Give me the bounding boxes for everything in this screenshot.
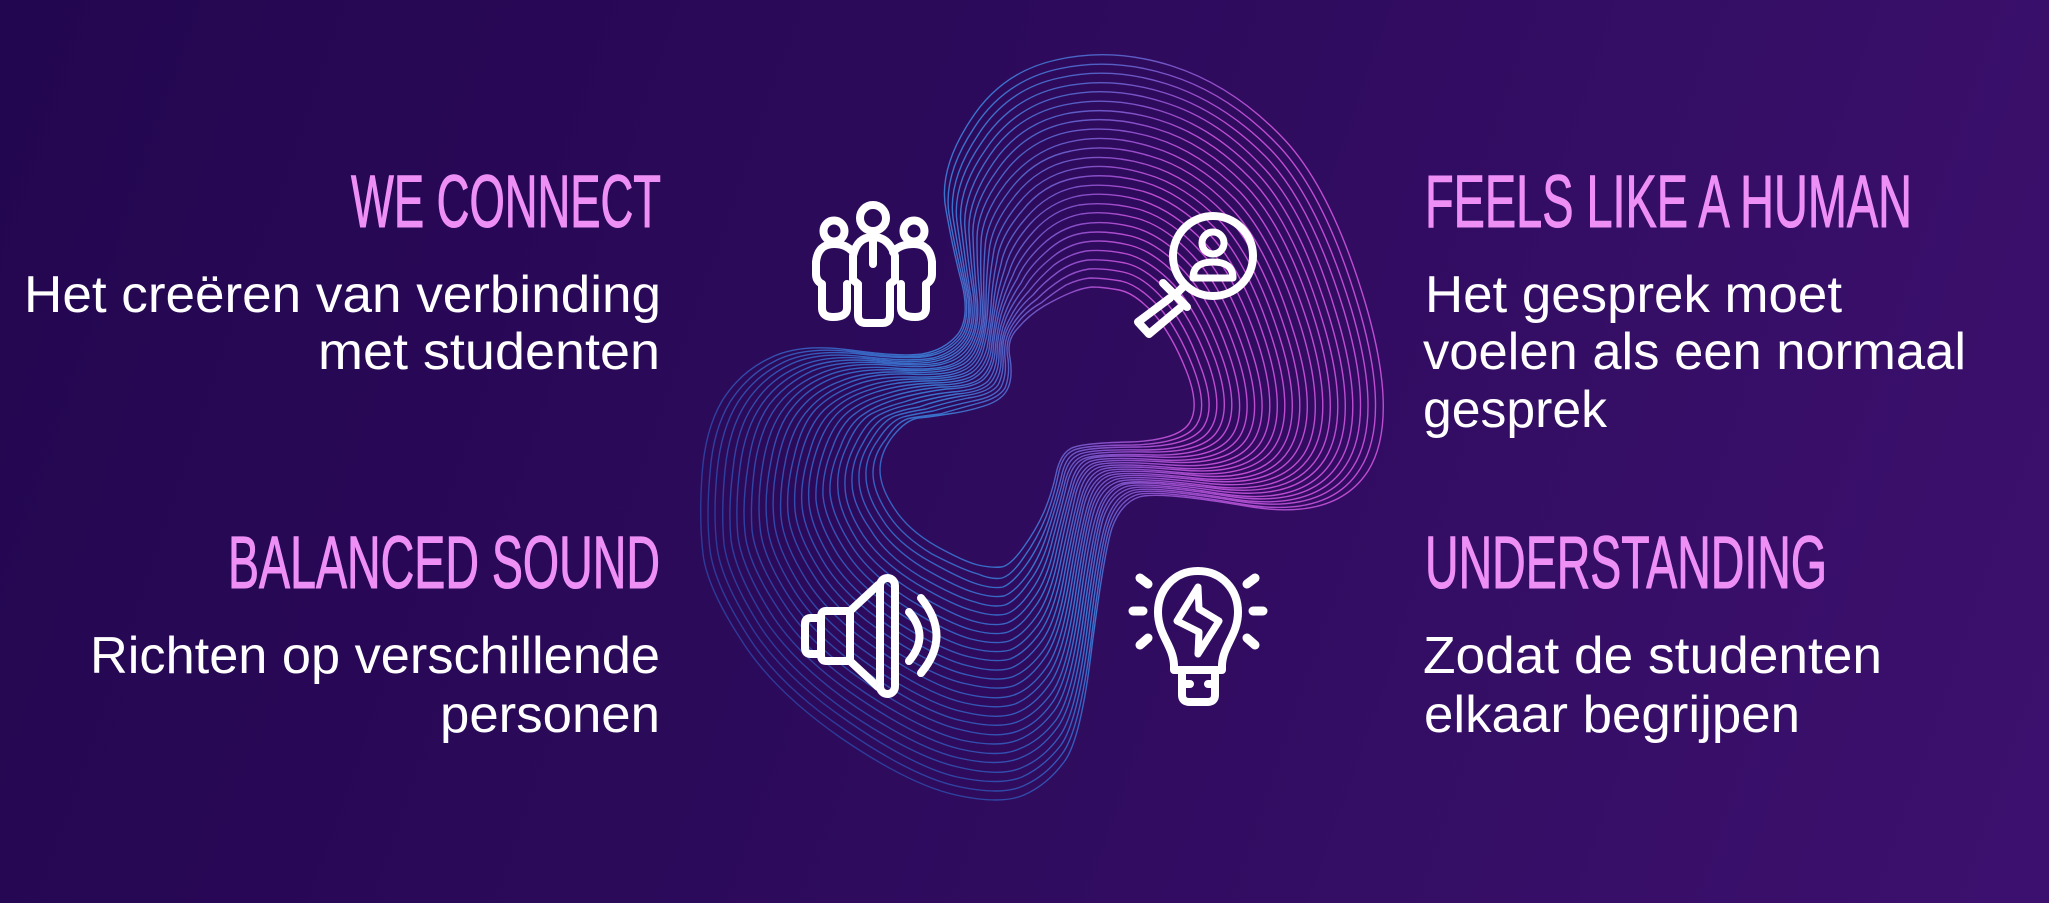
panel: understanding	[1423, 521, 1882, 744]
wave ribbon of contour lines	[701, 55, 1383, 800]
text: feels like a human description	[1423, 266, 1966, 439]
icon: light bulb with lightning	[1133, 571, 1263, 702]
text: feels like a human description: voelen als een normaal	[1423, 323, 1966, 381]
text: feels like a human description: gesprek	[1423, 381, 1608, 439]
text: understanding description: Zodat de studenten	[1423, 627, 1882, 685]
text: we connect description	[24, 266, 661, 381]
text: balanced sound description	[90, 627, 660, 744]
text: we connect description: met studenten	[318, 323, 660, 381]
heading: balanced sound: BALANCED SOUND	[228, 521, 660, 604]
panel: we connect	[24, 160, 661, 381]
text: we connect description: Het creëren van verbinding	[24, 266, 661, 324]
icon: magnifier with person	[1138, 216, 1253, 334]
text: balanced sound description: personen	[440, 686, 660, 744]
heading: we connect: WE CONNECT	[351, 160, 661, 243]
panel: feels like a human	[1423, 160, 1966, 439]
text: understanding description	[1423, 627, 1882, 744]
text: understanding description: elkaar begrijpen	[1424, 686, 1800, 744]
text: feels like a human description: Het gesprek moet	[1425, 266, 1843, 324]
icon: group of people	[816, 205, 932, 323]
icon: speaker	[805, 578, 936, 694]
panel: balanced sound	[90, 521, 660, 744]
heading: understanding: UNDERSTANDING	[1425, 521, 1827, 604]
text: balanced sound description: Richten op verschillende	[90, 627, 660, 685]
